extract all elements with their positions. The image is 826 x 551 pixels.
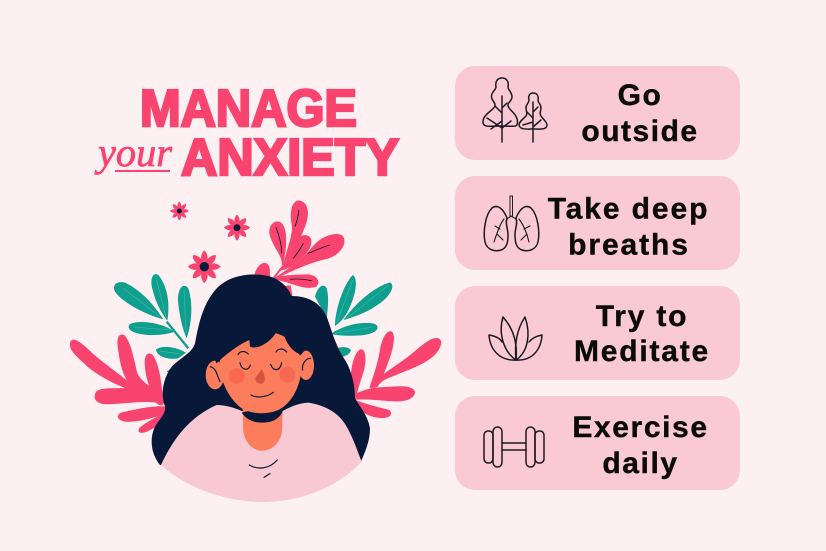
face [219,332,302,413]
label: take deep breaths [548,192,709,262]
label: exercise daily: daily [602,447,679,480]
face details [210,349,311,477]
label: go outside [581,79,699,148]
label: try to meditate [574,300,710,368]
title: ANXIETY [181,129,399,187]
icon: lungs [484,196,539,251]
label: try to meditate: Meditate [574,335,710,368]
flower: small [170,202,189,220]
body [161,403,362,502]
hair [152,275,370,480]
flowers [170,202,250,283]
panel: try to meditate [455,286,740,380]
label: try to meditate: Try to [596,300,688,333]
plant: lower pink leaves [72,333,439,431]
label: take deep breaths: breaths [568,228,690,262]
label: exercise daily: Exercise [572,411,709,444]
icon: dumbbell [484,427,544,467]
neck shadow [242,407,284,423]
panel: go outside [455,66,740,160]
cheeks and nose [229,367,295,384]
flower: large [188,250,221,283]
icon: trees [483,78,547,142]
title: MANAGE [140,80,357,138]
label: take deep breaths: Take deep [548,192,709,226]
panel: exercise daily [455,396,740,490]
bangs [203,297,323,363]
plant: upper pink branch [255,201,344,296]
flower: medium [224,215,250,241]
label: go outside: Go [618,79,662,112]
label: exercise daily [572,411,709,480]
plant: left teal leaves [114,274,392,378]
script word: your: your [94,130,172,175]
label: go outside: outside [581,115,699,148]
title [94,80,399,187]
illustration: woman with plants [72,201,439,502]
icon: lotus [489,317,542,360]
neck [243,408,283,451]
ears [206,351,314,389]
panel: take deep breaths [455,176,740,270]
